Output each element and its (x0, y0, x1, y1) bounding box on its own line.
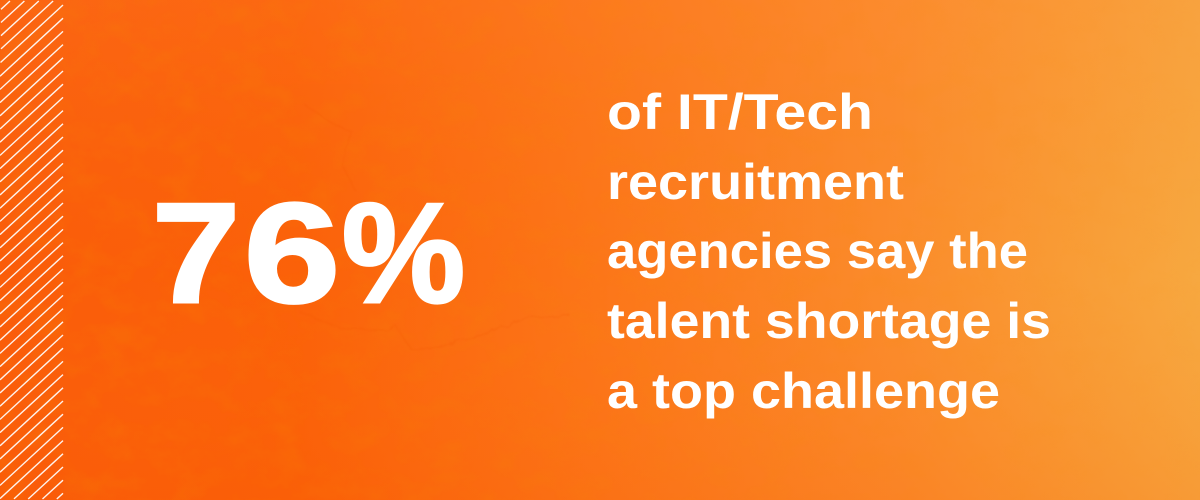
big statistic: 76%: 6 (244, 174, 340, 333)
statement text block: of IT/Tech (607, 84, 873, 140)
statement text block: agencies say the (607, 223, 1028, 279)
big statistic: 76%: 7 (152, 174, 240, 333)
statement text block: recruitment (607, 154, 904, 210)
hatched stripe band (0, 1, 63, 499)
statement text block (607, 84, 1051, 419)
background: watercolor edge marks (300, 105, 570, 350)
big statistic: 76% (152, 174, 465, 333)
statement text block: talent shortage is (607, 293, 1051, 349)
big statistic: 76%: % (342, 174, 465, 333)
background: watercolor texture (86, 482, 93, 489)
statement text block: a top challenge (607, 363, 1000, 419)
